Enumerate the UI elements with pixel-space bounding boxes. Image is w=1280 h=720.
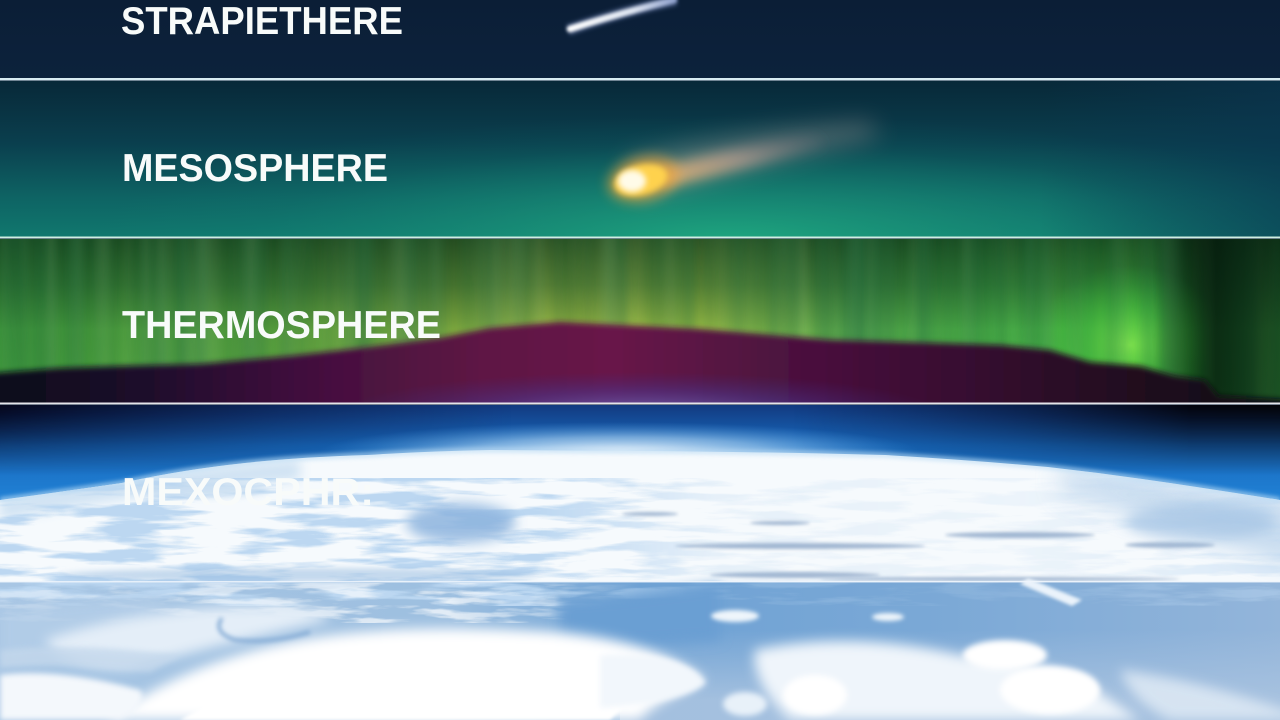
divider line 3 <box>0 402 1280 404</box>
soft limb edge <box>0 450 1280 500</box>
aurora curtains <box>0 239 1280 402</box>
icon: fiery meteor with tail <box>603 122 880 209</box>
panel: stratosphere band <box>0 0 1280 79</box>
streaked cloud texture <box>0 478 1280 606</box>
divider line 2 <box>0 236 1280 238</box>
panel: thermosphere band <box>0 239 1280 402</box>
heading: thermosphere label: THERMOSPHERE <box>122 304 441 347</box>
thin grey cloud shadows on right <box>622 512 1215 581</box>
earth cloud surface <box>0 445 1280 720</box>
icon: white meteor streak <box>568 0 676 30</box>
lower white cloud masses <box>105 628 705 720</box>
panel: mesosphere band <box>0 81 1280 236</box>
heading: stratosphere label: STRAPIETHERE <box>121 0 403 43</box>
maroon horizon silhouette <box>0 318 1280 402</box>
pale limb on the far left and right <box>0 460 300 520</box>
divider line 1 <box>0 78 1280 80</box>
open ocean blue region <box>560 583 720 650</box>
faint horizontal divider in clouds <box>0 581 1280 582</box>
panel: earth and troposphere <box>0 405 1280 720</box>
heading: garbled troposphere label: MEXOCPHR: <box>122 471 374 514</box>
heading: mesosphere label: MESOSPHERE <box>122 147 388 190</box>
atmosphere sky gradient <box>0 405 1280 505</box>
